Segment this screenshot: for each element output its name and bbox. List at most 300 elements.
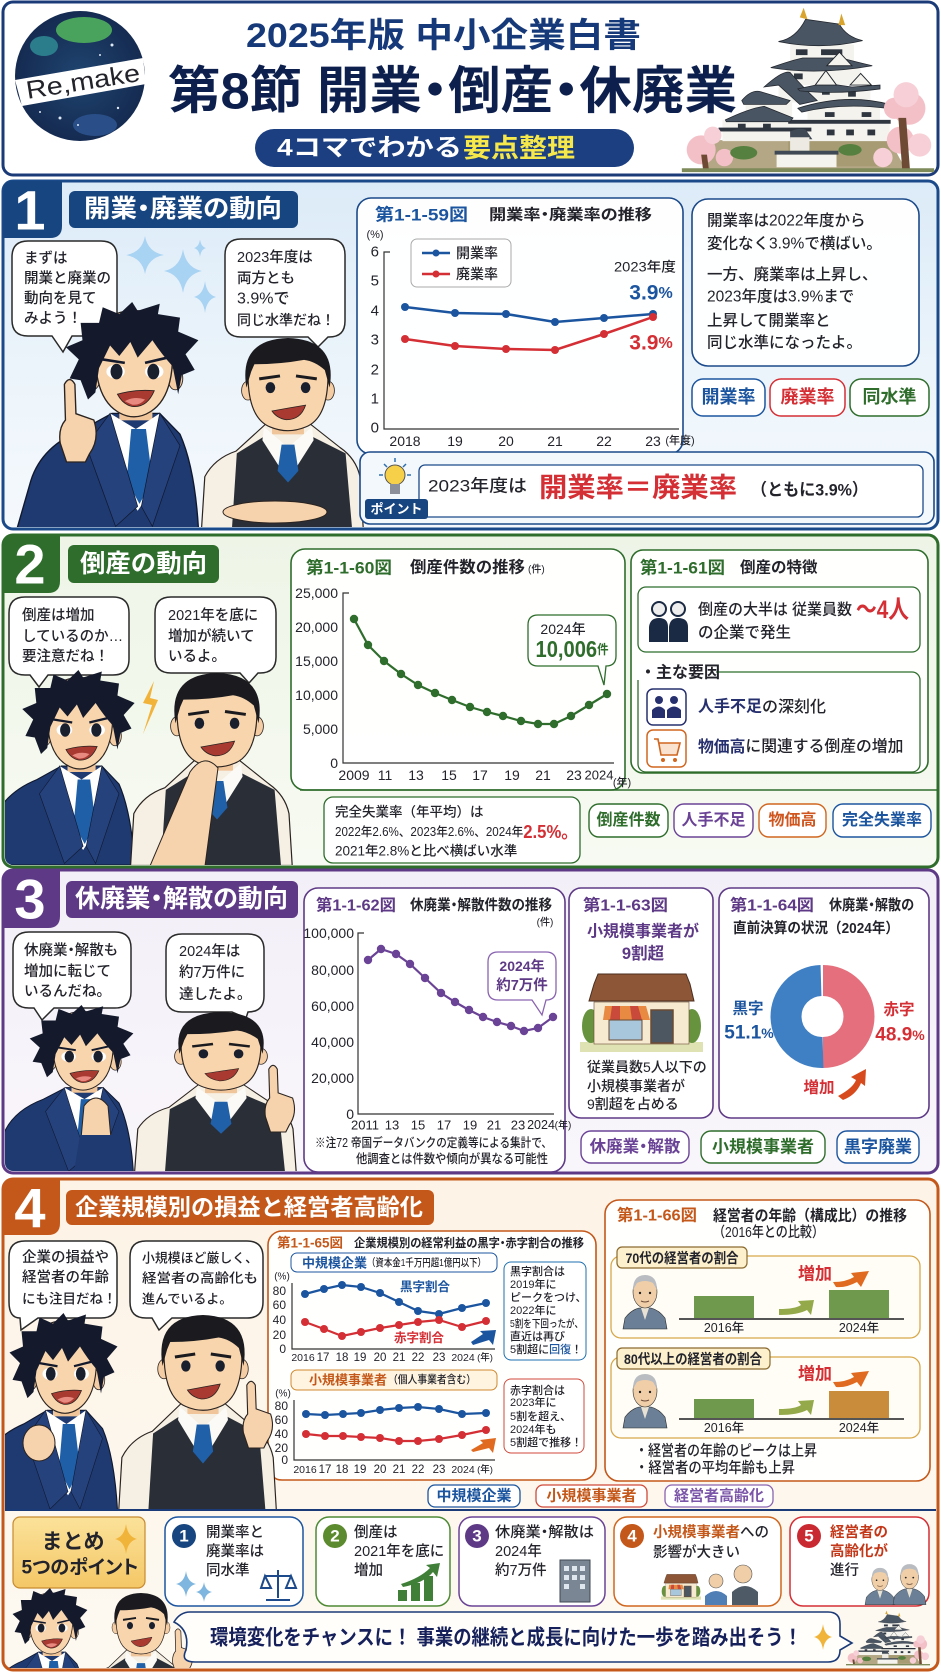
number tab 2 (3, 532, 60, 596)
sub chart: medium firms: 18 (336, 1352, 348, 1364)
characters 4 (0, 1313, 276, 1511)
sub panel: 70s: 2024年 (839, 1321, 879, 1335)
sub chart: small businesses: (年) (477, 1464, 493, 1476)
panel: header (3, 2, 938, 175)
sub chart: medium firms: 0 (279, 1342, 286, 1356)
sub chart: small businesses: 2024 (451, 1464, 475, 1476)
feature box: 倒産の大半は 従業員数 (698, 600, 852, 618)
donut chart (786, 980, 859, 1053)
sub chart: small businesses: 60 (275, 1413, 288, 1427)
text box 1: 変化なく3.9%で横ばい。 (707, 234, 882, 252)
callout 7万件 (488, 952, 556, 1015)
keyword tags 1 (692, 379, 929, 416)
sub chart: small businesses: 21 (393, 1464, 405, 1476)
sub chart: medium firms: 20 (374, 1352, 386, 1364)
card: 1-1-64: 51.1% (724, 1022, 774, 1044)
chart card: 1-1-59: 20 (498, 433, 514, 449)
number tab 2: 2 (14, 532, 46, 596)
chart card: 1-1-60: 15,000 (295, 653, 338, 669)
speech bubble 1a: まずは (24, 250, 68, 267)
sub chart: medium firms: 黒字割合 (400, 1279, 450, 1294)
sub chart: medium firms: 中規模企業 (302, 1256, 367, 1270)
chart card: 1-1-60 (291, 549, 631, 790)
sub chart: small businesses: 17 (319, 1464, 331, 1476)
card: 1-1-63: 小規模事業者が (587, 922, 699, 940)
summary card 1 (165, 1517, 303, 1606)
speech bubble 3b: 達したよ。 (179, 986, 252, 1003)
sub chart: small businesses: 80 (275, 1399, 288, 1413)
main causes box: 物価高に関連する倒産の増加 (698, 736, 903, 756)
chart card: 1-1-60: 第1-1-60図 (306, 558, 392, 578)
heading 4: 企業規模別の損益と経営者高齢化 (75, 1194, 423, 1220)
closing banner: 環境変化をチャンスに！ 事業の継続と成長に向けた一歩を踏み出そう！ (210, 1626, 802, 1650)
chart card: 1-1-62: 21 (487, 1118, 501, 1132)
sub chart: medium firms: 2016 (291, 1352, 315, 1364)
callout 10,006: 2024年 (540, 621, 586, 637)
card: 1-1-63 (569, 888, 713, 1118)
panel 2 (0, 532, 938, 867)
chart card: 1-1-62: 15 (411, 1118, 425, 1132)
sub chart: small businesses: 2024年も (510, 1422, 556, 1436)
speech bubble 1b: 両方とも (237, 270, 295, 287)
chart card: 1-1-62: 60,000 (311, 998, 354, 1014)
speech bubble 2b (155, 597, 276, 683)
sub chart: small businesses: 22 (412, 1464, 424, 1476)
summary card 1: 開業率と (206, 1524, 264, 1541)
speech bubble 2b: 2021年を底に (168, 607, 258, 624)
keyword tags 3: 小規模事業者 (712, 1138, 814, 1156)
chart card: 1-1-60: 13 (408, 767, 424, 783)
chart card: 1-1-60: 11 (378, 767, 392, 783)
speech bubble 3a: 休廃業・解散も (24, 941, 117, 959)
keyword tags 3: 黒字廃業 (844, 1138, 912, 1156)
chart card: 1-1-59: 3.9% (629, 332, 673, 354)
panel 3 (0, 868, 938, 1173)
main causes box: ・主な要因 (640, 662, 720, 682)
summary card 3: 3 (472, 1526, 482, 1546)
chart card: 1-1-62: 23 (511, 1118, 525, 1132)
card: 1-1-63: 小規模事業者が (587, 1078, 685, 1094)
note: 他調査とは件数や傾向が異なる可能性 (356, 1151, 548, 1166)
number tab 3: 3 (14, 868, 46, 930)
summary card 1: 同水準 (206, 1562, 250, 1579)
chart card: 1-1-60: 2024 (585, 768, 613, 782)
speech bubble 1b (225, 239, 345, 347)
title: section: 第8節 開業・倒産・休廃業 (168, 62, 737, 120)
sub chart: small businesses: 赤字割合は (510, 1383, 565, 1397)
icon: shop and owners (661, 1565, 758, 1605)
heading 2 (68, 545, 219, 583)
icon: Re,make logo (15, 11, 146, 141)
speech bubble 3a: 増加に転じて (24, 962, 111, 980)
card: 1-1-66: 第1-1-66図 (617, 1206, 697, 1224)
sub chart: small businesses: 5割超で推移！ (510, 1435, 582, 1449)
chart card: 1-1-59: 4 (371, 302, 379, 320)
summary card 5 (790, 1517, 929, 1606)
sub chart: medium firms: 22 (412, 1352, 424, 1364)
chart card: 1-1-60: 21 (535, 767, 551, 783)
summary card 2: 倒産は (354, 1524, 398, 1541)
point tag: ポイント (370, 502, 423, 516)
text box 1 (692, 199, 919, 366)
line: close rate (405, 317, 653, 350)
chart card: 1-1-59: 21 (547, 433, 563, 449)
summary card 3: 2024年 (495, 1543, 542, 1560)
icon: Re,make logo: Re,make (24, 59, 142, 105)
chart card: 1-1-62: 第1-1-62図 (316, 896, 396, 914)
chart card: 1-1-60: 倒産件数の推移 (410, 558, 525, 576)
main causes box (636, 662, 920, 772)
speech bubble 1a: 動向を見て (24, 290, 96, 307)
subtitle pill: 4コマでわかる (277, 134, 462, 162)
sub chart: medium firms: 20 (273, 1328, 286, 1342)
card: 1-1-61 (631, 550, 928, 773)
speech bubble 4a: にも注目だね！ (22, 1290, 116, 1306)
card: 1-1-63: 9割超を占める (587, 1096, 679, 1112)
card: 1-1-64: 赤字 (883, 1000, 915, 1018)
summary card 3: 約7万件 (495, 1562, 547, 1579)
chart card: 1-1-62: 休廃業・解散件数の推移 (410, 896, 552, 914)
keyword tags 4: 小規模事業者 (546, 1486, 637, 1504)
speech bubble 3a (13, 932, 131, 1020)
speech bubble 3b: 約7万件に (179, 964, 245, 981)
card: 1-1-66 (605, 1200, 930, 1481)
chart card: 1-1-59: (年度) (665, 433, 695, 447)
characters 1 (17, 302, 363, 528)
chart card: 1-1-59: 5 (371, 272, 379, 290)
sub chart: small businesses (275, 1370, 584, 1476)
legend (411, 239, 511, 287)
sub chart: small businesses: 23 (433, 1464, 445, 1476)
speech bubble 2a: 倒産は増加 (22, 606, 94, 624)
icon: sparkles (176, 1571, 212, 1602)
chart card: 1-1-59: 23 (645, 433, 661, 449)
title: white paper: 2025年版 中小企業白書 (246, 17, 641, 55)
keyword tags 3 (581, 1131, 919, 1163)
chart card: 1-1-60: 19 (504, 767, 520, 783)
card: 1-1-64: 増加 (803, 1078, 835, 1096)
note (315, 1135, 552, 1166)
sub panel: 80s: 80代以上の経営者の割合 (624, 1351, 762, 1367)
point box: （ともに3.9%） (751, 480, 868, 500)
arrow: increase (838, 1069, 866, 1100)
bullets (635, 1442, 817, 1476)
keyword tags 2: 物価高 (768, 810, 817, 829)
speech bubble 1b: 2023年度は (237, 249, 313, 266)
chart card: 1-1-62: 40,000 (311, 1034, 354, 1050)
chart card: 1-1-59: 2 (371, 362, 379, 378)
chart card: 1-1-59: 19 (447, 433, 463, 449)
feature box: ～4人 (856, 596, 909, 624)
keyword tags 1: 同水準 (862, 386, 916, 407)
chart card: 1-1-59: 2023年度 (614, 258, 677, 274)
summary card 2: 増加 (354, 1561, 383, 1579)
sub chart: small businesses: 19 (354, 1464, 366, 1476)
sub chart: small businesses: （個人事業者含む） (388, 1372, 476, 1386)
line: bankruptcies (354, 619, 607, 724)
card: 1-1-64: 48.9% (875, 1024, 925, 1046)
speech bubble 4b: 小規模ほど厳しく、 (142, 1250, 258, 1266)
keyword tags 2: 人手不足 (681, 810, 746, 829)
characters 3 (0, 1005, 296, 1173)
speech bubble 4b: 経営者の高齢化も (142, 1270, 258, 1286)
number tab 4: 4 (14, 1176, 46, 1240)
chart card: 1-1-62: 80,000 (311, 962, 354, 978)
speech bubble 2a: 要注意だね！ (22, 648, 109, 665)
card: 1-1-63: 従業員数5人以下の (587, 1059, 707, 1075)
sub chart: small businesses: 小規模事業者 (309, 1372, 387, 1388)
chart card: 1-1-62: 17 (437, 1118, 451, 1132)
point tag (365, 499, 428, 519)
speech bubble 2a (9, 597, 129, 687)
divider (5, 1509, 936, 1511)
summary badge: 5つのポイント (22, 1556, 138, 1578)
summary card 5: 進行 (830, 1562, 859, 1579)
chart card: 1-1-60: (件) (528, 562, 545, 576)
sub chart: medium firms: 60 (273, 1298, 286, 1312)
line: open rate (405, 307, 653, 322)
summary card 4 (614, 1517, 781, 1606)
heading 4 (66, 1190, 434, 1225)
speech bubble 1b: 同じ水準だね！ (237, 312, 335, 328)
number tab 4 (3, 1176, 60, 1240)
text box 1: 開業率は2022年度から (707, 212, 865, 230)
sub chart: medium firms: 2019年に (510, 1277, 556, 1291)
speech bubble 1b: 3.9%で (237, 290, 289, 308)
sub chart: small businesses: 18 (336, 1464, 348, 1476)
chart card: 1-1-62 (303, 888, 571, 1172)
chart card: 1-1-59: 開業率・廃業率の推移 (489, 206, 652, 224)
sub panel: 70s: 2016年 (704, 1321, 744, 1335)
sub chart: medium firms: 5割超に回復！ (510, 1342, 582, 1356)
sub chart: medium firms: 40 (273, 1313, 286, 1327)
feature box (638, 587, 920, 652)
legend: 廃業率 (456, 266, 498, 282)
number tab 3 (3, 868, 60, 930)
chart card: 1-1-65: 第1-1-65図 (277, 1234, 343, 1250)
card: 1-1-61: 第1-1-61図 (640, 558, 725, 578)
subtitle pill (255, 129, 634, 167)
sub chart: small businesses: (%) (275, 1388, 291, 1400)
speech bubble 3b: 2024年は (179, 943, 240, 960)
heading 3 (66, 881, 298, 918)
card: 1-1-66: 経営者の年齢（構成比）の推移 (713, 1206, 907, 1224)
keyword tags 3: 休廃業・解散 (590, 1137, 681, 1156)
heading 2: 倒産の動向 (80, 550, 207, 578)
chart card: 1-1-60: (年) (613, 775, 631, 789)
summary card 1: 廃業率は (206, 1542, 264, 1560)
icon: castle (682, 8, 934, 172)
note: ※注72 帝国データバンクの定義等による集計で、 (315, 1135, 552, 1150)
keyword tags 2 (589, 804, 931, 837)
sub chart: medium firms: 21 (393, 1352, 405, 1364)
callout 7万件: 2024年 (499, 958, 545, 974)
summary card 4: 4 (627, 1526, 637, 1546)
speech bubble 2a: しているのか… (22, 628, 123, 645)
chart card: 1-1-59: (%) (366, 229, 384, 241)
callout 7万件: 約7万件 (496, 977, 548, 994)
chart card: 1-1-59: 3 (371, 332, 379, 348)
callout 10,006: 10,006件 (536, 636, 608, 662)
chart card: 1-1-60: 0 (330, 755, 338, 771)
chart card: 1-1-60: 10,000 (295, 687, 338, 703)
unemployment box: 2022年2.6%、2023年2.6%、2024年2.5%。 (335, 822, 578, 842)
line: closures (368, 949, 553, 1031)
card: 1-1-64 (719, 888, 929, 1118)
sub panel: 80s: 2016年 (704, 1421, 744, 1435)
sub chart: medium firms: ピークをつけ、 (510, 1291, 586, 1304)
sub chart: small businesses: 0 (281, 1453, 288, 1467)
sub panel: 80s: 2024年 (839, 1421, 879, 1435)
chart card: 1-1-65: 企業規模別の経常利益の黒字・赤字割合の推移 (354, 1235, 584, 1250)
summary card 2 (316, 1517, 450, 1606)
summary badge (13, 1517, 145, 1588)
chart card: 1-1-59: 2018 (389, 433, 421, 449)
summary card 5: 高齢化が (830, 1542, 888, 1560)
speech bubble 2b: いるよ。 (168, 648, 226, 665)
sub chart: medium firms: 2022年に (510, 1303, 556, 1317)
legend: 開業率 (456, 245, 498, 261)
speech bubble 4a (9, 1241, 117, 1330)
summary card 4: 小規模事業者への (653, 1523, 769, 1541)
main causes box: 人手不足の深刻化 (698, 696, 826, 716)
keyword tags 4: 中規模企業 (436, 1486, 512, 1504)
speech bubble 1a: 開業と廃業の (24, 269, 111, 287)
text box 1: 同じ水準になったよ。 (707, 334, 862, 352)
card: 1-1-61: 倒産の特徴 (740, 558, 818, 576)
card: 1-1-64: 休廃業・解散の (829, 896, 914, 914)
sub chart: medium firms: (年) (477, 1352, 493, 1364)
panel 4 (0, 1176, 938, 1672)
chart card: 1-1-62: 100,000 (303, 925, 354, 941)
callout 10,006 (528, 615, 616, 685)
number tab 1 (3, 178, 62, 242)
unemployment box: 完全失業率（年平均）は (335, 804, 484, 820)
chart card: 1-1-60: 25,000 (295, 585, 338, 601)
speech bubble 3b (166, 934, 264, 1018)
chart card: 1-1-59 (357, 198, 695, 454)
sub chart: medium firms: 5割を下回ったが、 (510, 1317, 583, 1330)
chart card: 1-1-59: 3.9% (629, 282, 673, 304)
card: 1-1-64: 第1-1-64図 (730, 896, 814, 914)
icon: small castle (846, 1611, 930, 1665)
card: 1-1-63: 第1-1-63図 (583, 896, 668, 914)
icon: scale (261, 1570, 296, 1600)
card: 1-1-66: （2016年との比較） (713, 1224, 824, 1241)
chart card: 1-1-59: 第1-1-59図 (375, 204, 468, 224)
sub panel: 80s: 増加 (798, 1364, 832, 1384)
chart card: 1-1-60: 2009 (338, 767, 370, 783)
chart card: 1-1-62: 0 (346, 1106, 354, 1122)
icon: cart (647, 730, 686, 767)
keyword tags 1: 開業率 (702, 387, 756, 407)
icon: rising bars (398, 1563, 440, 1601)
speech bubble 1a: みよう！ (24, 310, 82, 327)
unemployment box (324, 797, 580, 863)
keyword tags 2: 完全失業率 (842, 810, 922, 829)
icon: light bulb (379, 458, 411, 494)
summary card 5: 5 (804, 1526, 814, 1546)
sub chart: small businesses: 5割を超え、 (510, 1409, 571, 1423)
bullets: ・経営者の年齢のピークは上昇 (635, 1442, 817, 1460)
summary card 2: 2021年を底に (354, 1543, 444, 1560)
sub chart: medium firms: 23 (433, 1352, 445, 1364)
summary card 2: 2 (330, 1526, 340, 1546)
chart card: 1-1-60: 23 (566, 767, 582, 783)
panel 1 (3, 178, 938, 529)
sub chart: medium firms: 赤字割合 (394, 1330, 444, 1345)
heading 1 (69, 191, 298, 228)
card: 1-1-63: 9割超 (622, 944, 665, 963)
point box: 開業率＝廃業率 (539, 473, 737, 503)
chart card: 1-1-62: 2024 (527, 1118, 555, 1132)
characters 2 (0, 670, 292, 866)
sub panel: 80s (611, 1348, 920, 1438)
chart card: 1-1-65 (268, 1231, 596, 1480)
text box 1: 上昇して開業率と (707, 312, 831, 330)
speech bubble 1a (12, 241, 117, 352)
chart card: 1-1-60: 20,000 (295, 619, 338, 635)
icon: lightning (143, 681, 158, 734)
chart card: 1-1-62: 20,000 (311, 1070, 354, 1086)
chart card: 1-1-62: (年) (555, 1118, 571, 1132)
feature box: の企業で発生 (698, 624, 791, 642)
card: 1-1-64: 黒字 (732, 1000, 764, 1018)
heading 1: 開業・廃業の動向 (84, 195, 282, 223)
keyword tags 4 (428, 1485, 773, 1507)
sub chart: medium firms (273, 1253, 586, 1364)
divider (300, 789, 938, 791)
icon: people (649, 602, 688, 642)
sub panel: 70s: 増加 (798, 1264, 832, 1284)
summary card 1: 1 (179, 1526, 189, 1546)
sub chart: small businesses: 20 (374, 1464, 386, 1476)
icon: shop (580, 974, 703, 1052)
heading 3: 休廃業・解散の動向 (75, 885, 288, 913)
sub chart: medium firms: 19 (354, 1352, 366, 1364)
keyword tags 1: 廃業率 (780, 387, 834, 407)
subtitle pill: 要点整理 (463, 133, 575, 163)
sub chart: medium firms: 17 (317, 1352, 329, 1364)
summary card 3: 休廃業・解散は (495, 1523, 594, 1541)
point box (360, 452, 934, 524)
bullets: ・経営者の平均年齢も上昇 (635, 1460, 795, 1476)
summary badge: まとめ (42, 1530, 104, 1554)
text box 1: 一方、廃業率は上昇し、 (707, 266, 878, 284)
chart card: 1-1-60: 5,000 (303, 721, 338, 737)
sub chart: small businesses: 40 (275, 1427, 288, 1441)
sub chart: medium firms: 2024 (451, 1352, 475, 1364)
speech bubble 3a: いるんだね。 (24, 983, 111, 1000)
chart card: 1-1-62: 2011 (351, 1118, 379, 1132)
sub chart: medium firms: 80 (273, 1284, 286, 1298)
sub chart: small businesses: 2023年に (510, 1395, 556, 1409)
speech bubble 4a: 経営者の年齢 (22, 1269, 109, 1286)
chart card: 1-1-59: 1 (371, 390, 379, 408)
number tab 1: 1 (14, 178, 46, 242)
sparkles (126, 236, 216, 313)
speech bubble 2b: 増加が続いて (168, 627, 255, 645)
chart card: 1-1-62: 19 (463, 1118, 477, 1132)
sub chart: small businesses: 2016 (293, 1464, 317, 1476)
chart card: 1-1-59: 22 (596, 433, 612, 449)
sub panel: 70s: 70代の経営者の割合 (626, 1250, 738, 1266)
chart card: 1-1-60: 15 (441, 767, 457, 783)
icon: building (560, 1560, 590, 1602)
summary card 5: 経営者の (830, 1523, 888, 1541)
point box: 2023年度は (428, 476, 527, 496)
chart card: 1-1-59: 6 (371, 244, 379, 260)
